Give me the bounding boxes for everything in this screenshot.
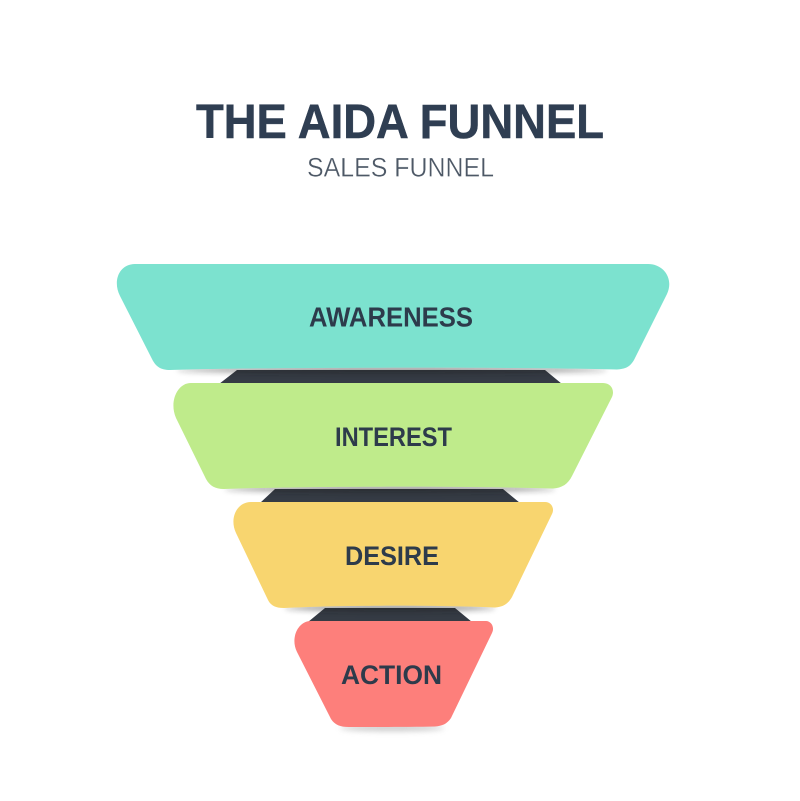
awareness band: [117, 264, 669, 370]
desire label: DESIRE: [345, 541, 439, 571]
awareness label: AWARENESS: [309, 302, 473, 332]
shadow: beneath action: [340, 725, 444, 731]
funnel tier: awareness: [117, 264, 669, 370]
funnel tier: desire: [233, 502, 553, 608]
shadow: beneath interest: [225, 486, 555, 492]
action band: [294, 621, 493, 727]
connector: desire to action: [308, 608, 472, 622]
funnel tier: action: [294, 621, 493, 727]
action label: ACTION: [341, 660, 442, 690]
shadow: beneath awareness: [177, 367, 607, 373]
shadow: beneath desire: [285, 605, 495, 611]
interest band: [173, 383, 613, 489]
funnel tier: interest: [173, 383, 613, 489]
title: THE AIDA FUNNEL: [196, 96, 604, 149]
desire band: [233, 502, 553, 608]
connector: awareness to interest: [219, 370, 562, 384]
connector: interest to desire: [260, 489, 520, 503]
subtitle: SALES FUNNEL: [307, 152, 494, 182]
interest label: INTEREST: [335, 422, 452, 452]
